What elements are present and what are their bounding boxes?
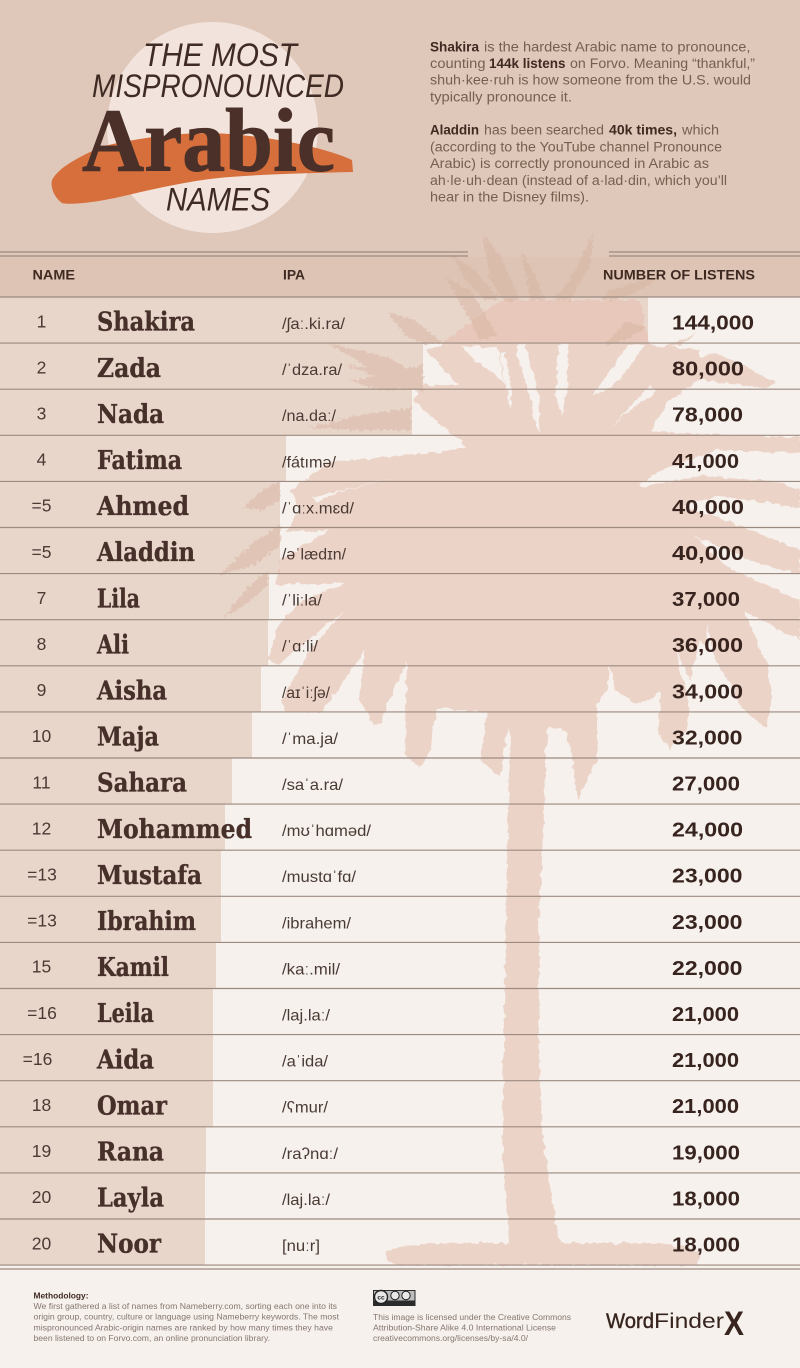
row 12: Mohammed: [32, 815, 743, 845]
row 6: Aladdin: =5: [32, 542, 51, 562]
row 8: Ali: Ali: [96, 630, 129, 660]
row 18: Omar: 21,000: [672, 1096, 739, 1118]
row 11: Sahara: [32, 769, 740, 799]
row 9: Aisha: [37, 676, 743, 706]
license note: This image is licensed under the Creative Commons: [373, 1312, 571, 1322]
row 20: Layla: 18,000: [672, 1188, 740, 1210]
row 12: Mohammed: 24,000: [672, 820, 743, 842]
row 10: Maja: 32,000: [672, 727, 742, 749]
row 14: Ibrahim: Ibrahim: [97, 907, 196, 937]
icon: creative commons badge: [373, 1290, 416, 1306]
row 19: Rana: 19,000: [672, 1142, 740, 1164]
row 1: Shakira: [37, 308, 754, 338]
row 11: Sahara: 27,000: [672, 774, 740, 796]
row 19: Rana: Rana: [97, 1138, 164, 1168]
row 19: Rana: /raʔnɑː/: [282, 1146, 339, 1163]
row 17: Aida: [23, 1045, 739, 1075]
row 2: Zada: 2: [37, 357, 46, 377]
license note: [373, 1312, 571, 1343]
row 10: Maja: Maja: [97, 723, 159, 753]
row 16: Leila: [27, 999, 739, 1029]
row 12: Mohammed: Mohammed: [97, 815, 252, 845]
methodology note: [34, 1290, 340, 1343]
intro paragraph: Aladdin: Arabic) is correctly pronounced in Arabic as: [430, 156, 709, 171]
row 20: Layla: /laj.laː/: [282, 1192, 331, 1209]
row 9: Aisha: 9: [37, 680, 46, 700]
row 3: Nada: Nada: [97, 400, 164, 430]
title line: the most: THE MOST: [143, 37, 299, 73]
row 15: Kamil: [32, 953, 742, 983]
row 1: Shakira: 1: [37, 311, 46, 331]
methodology note: mispronounced Arabic-origin names are ranked by how many times they have: [34, 1322, 333, 1332]
row 12: Mohammed: /mʊˈhɑməd/: [282, 823, 372, 840]
row 13: Mustafa: Mustafa: [97, 861, 202, 891]
title line: names: NAMES: [166, 182, 270, 218]
palm feathery fronds: [220, 231, 667, 618]
intro paragraph: Aladdin: [430, 123, 727, 205]
title circle: [107, 22, 318, 233]
row 4: Fatima: /fátımə/: [282, 454, 337, 471]
row 6: Aladdin: /əˈlædɪn/: [282, 546, 347, 564]
intro paragraph: Shakira: is the hardest Arabic name to pronounce,: [484, 39, 750, 54]
intro paragraph: Shakira: counting: [430, 56, 486, 71]
row 18: Omar: 18: [32, 1095, 51, 1115]
row 18: Omar: [32, 1091, 739, 1121]
row 5: Ahmed: /ˈɑːx.mɛd/: [282, 500, 355, 517]
row 3: Nada: [37, 400, 743, 430]
row 1: Shakira: Shakira: [97, 308, 195, 338]
row 11: Sahara: Sahara: [97, 769, 187, 799]
intro paragraph: Aladdin: has been searched: [484, 123, 604, 138]
row 9: Aisha: /aɪˈiːʃə/: [282, 685, 331, 702]
row 10: Maja: [32, 723, 742, 753]
row 17: Aida: 21,000: [672, 1050, 739, 1072]
row 14: Ibrahim: /ibrahem/: [282, 915, 352, 932]
row 15: Kamil: 22,000: [672, 958, 742, 980]
intro paragraph: Aladdin: ah·le·uh·dean (instead of a·lad·din, which you’ll: [430, 173, 727, 188]
row 7: Lila: Lila: [97, 584, 140, 614]
logo: WordFinderX: X: [724, 1305, 744, 1343]
intro paragraph: Shakira: shuh·kee·ruh is how someone from the U.S. would: [430, 73, 751, 88]
row 13: Mustafa: =13: [27, 865, 57, 885]
row 14: Ibrahim: [27, 907, 742, 937]
row 8: Ali: /ˈɑːli/: [282, 639, 319, 656]
row 4: Fatima: 41,000: [672, 451, 739, 473]
logo: WordFinderX: Word: [606, 1310, 654, 1333]
row 19: Rana: 19: [32, 1141, 51, 1161]
row 5: Ahmed: Ahmed: [96, 492, 189, 522]
methodology note: been listened to on Forvo.com, an online pronunciation library.: [34, 1333, 270, 1343]
row 8: Ali: 8: [37, 634, 46, 654]
row 4: Fatima: [37, 446, 739, 476]
row 2: Zada: /ˈdza.ra/: [282, 362, 343, 379]
row 2: Zada: Zada: [97, 354, 161, 384]
row 21: Noor: 20: [32, 1233, 51, 1253]
row 17: Aida: =16: [23, 1049, 52, 1069]
row 2: Zada: [37, 354, 744, 384]
row 12: Mohammed: 12: [32, 818, 51, 838]
table rows: [23, 308, 754, 1260]
row 2: Zada: 80,000: [672, 359, 744, 381]
row 7: Lila: /ˈliːla/: [282, 593, 323, 610]
row 11: Sahara: /saˈa.ra/: [282, 777, 344, 794]
table column headings: NAME: [32, 268, 75, 282]
row 15: Kamil: /kaː.mil/: [282, 961, 341, 978]
row 13: Mustafa: [27, 861, 742, 891]
row 15: Kamil: 15: [32, 957, 51, 977]
row 21: Noor: 18,000: [672, 1234, 740, 1256]
table column headings: NUMBER OF LISTENS: [603, 268, 755, 282]
row 3: Nada: 78,000: [672, 405, 743, 427]
icon: creative commons badge: cc: [377, 1294, 385, 1302]
row 1: Shakira: /ʃaː.ki.ra/: [282, 316, 346, 333]
orange brush stroke: [52, 133, 353, 204]
intro paragraph: Aladdin: Aladdin: [430, 123, 479, 138]
header band shade: [0, 257, 800, 297]
row 6: Aladdin: 40,000: [672, 543, 744, 565]
row 6: Aladdin: [32, 538, 744, 568]
row 5: Ahmed: 40,000: [672, 497, 744, 519]
title word: arabic: Arabic: [82, 92, 335, 190]
intro paragraph: Aladdin: hear in the Disney films).: [430, 190, 589, 205]
row 7: Lila: 37,000: [672, 589, 740, 611]
row 8: Ali: 36,000: [672, 635, 743, 657]
row 21: Noor: Noor: [97, 1230, 161, 1260]
row 5: Ahmed: [32, 492, 744, 522]
row 3: Nada: 3: [37, 404, 46, 424]
row 9: Aisha: Aisha: [96, 676, 167, 706]
row 4: Fatima: 4: [37, 450, 47, 470]
row 7: Lila: 7: [37, 588, 46, 608]
license note: Attribution-Share Alike 4.0 International License: [373, 1323, 556, 1333]
row 1: Shakira: 144,000: [672, 312, 754, 334]
row 17: Aida: /aˈida/: [282, 1054, 329, 1071]
row 20: Layla: 20: [32, 1187, 51, 1207]
row 15: Kamil: Kamil: [97, 953, 169, 983]
row 19: Rana: [32, 1138, 740, 1168]
table rules: [0, 252, 800, 1269]
intro paragraph: Shakira: typically pronounce it.: [430, 90, 572, 104]
row 7: Lila: [37, 584, 740, 614]
header background: [0, 0, 800, 297]
title line: mispronounced: MISPRONOUNCED: [92, 68, 344, 104]
row 10: Maja: /ˈma.ja/: [282, 731, 339, 748]
row 13: Mustafa: 23,000: [672, 866, 742, 888]
intro paragraph: Aladdin: which: [681, 123, 719, 138]
row 16: Leila: =16: [27, 1003, 57, 1023]
row 16: Leila: 21,000: [672, 1004, 739, 1026]
logo: WordFinderX: Finder: [654, 1310, 724, 1333]
logo: WordFinderX: [606, 1305, 744, 1343]
title block: [52, 22, 353, 233]
row 8: Ali: [37, 630, 743, 660]
row 20: Layla: Layla: [97, 1184, 164, 1214]
row 5: Ahmed: =5: [32, 496, 51, 516]
palm tree silhouette: [268, 300, 800, 1265]
row 10: Maja: 10: [32, 726, 51, 746]
intro paragraph: Aladdin: 40k times,: [609, 123, 677, 138]
row 9: Aisha: 34,000: [672, 681, 743, 703]
row 20: Layla: [32, 1184, 740, 1214]
row 14: Ibrahim: 23,000: [672, 912, 742, 934]
row 18: Omar: /ʕmur/: [282, 1100, 329, 1117]
row 13: Mustafa: /mustɑˈfɑ/: [282, 869, 357, 886]
row 21: Noor: [nuːr]: [282, 1238, 320, 1255]
intro paragraph: Shakira: on Forvo. Meaning “thankful,”: [570, 56, 755, 71]
row 11: Sahara: 11: [32, 772, 51, 792]
row 4: Fatima: Fatima: [97, 446, 182, 476]
methodology note: We first gathered a list of names from Nameberry.com, sorting each one into its: [34, 1301, 337, 1311]
license note: creativecommons.org/licenses/by-sa/4.0/: [373, 1333, 529, 1343]
intro paragraph: Shakira: [430, 39, 755, 104]
row 16: Leila: Leila: [97, 999, 154, 1029]
intro paragraph: Shakira: 144k listens: [489, 56, 566, 71]
intro paragraph: Shakira: Shakira: [430, 39, 479, 54]
row 16: Leila: /laj.laː/: [282, 1008, 331, 1024]
methodology note: origin group, country, culture or language using Nameberry keywords. The most: [34, 1312, 340, 1322]
row 3: Nada: /na.daː/: [282, 408, 337, 425]
row 21: Noor: [32, 1230, 740, 1260]
listens bars: [0, 297, 648, 1265]
row 14: Ibrahim: =13: [27, 911, 57, 931]
methodology note: Methodology:: [34, 1290, 89, 1300]
row 6: Aladdin: Aladdin: [96, 538, 195, 568]
row 17: Aida: Aida: [96, 1045, 154, 1075]
table column headings: [32, 268, 755, 282]
intro paragraph: Aladdin: (according to the YouTube channel Pronounce: [430, 140, 722, 154]
table column headings: IPA: [283, 268, 305, 282]
row 18: Omar: Omar: [97, 1091, 167, 1121]
